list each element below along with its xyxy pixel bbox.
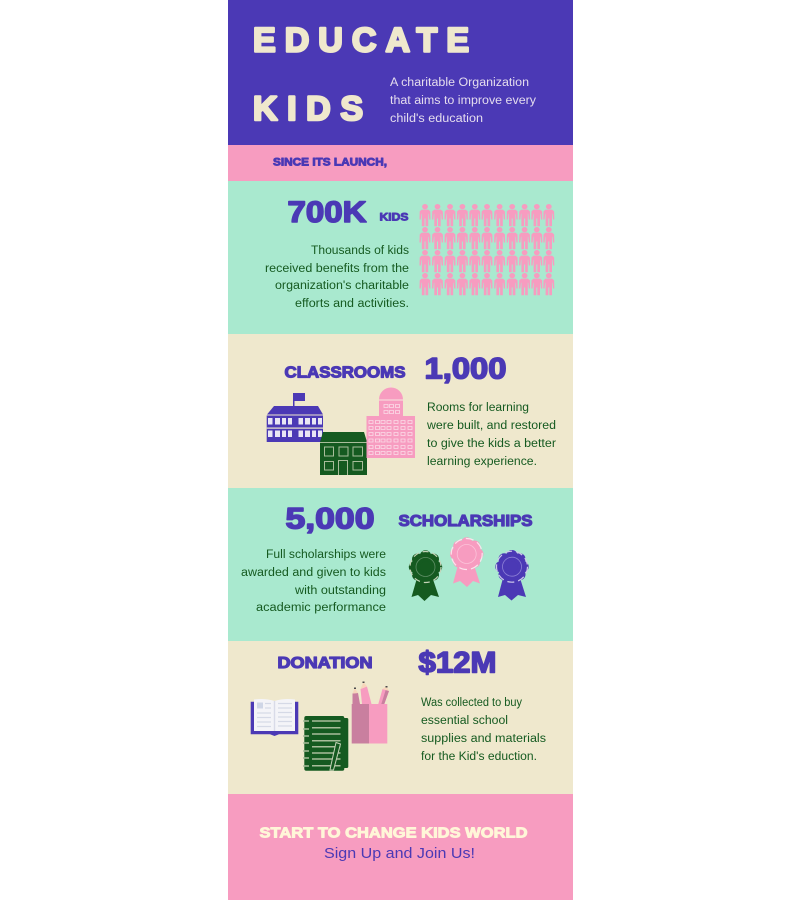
text: classrooms description: to give the kids a better	[427, 438, 556, 450]
text: donation description	[421, 697, 546, 763]
text: scholarships description: awarded and given to kids	[241, 567, 386, 579]
heading: start to change kids world: START TO CHANGE KIDS WORLD	[260, 826, 528, 842]
icon: blue school building	[267, 393, 323, 442]
heading: since its launch: SINCE ITS LAUNCH,	[273, 156, 387, 168]
label: donation: DONATION	[278, 655, 372, 672]
subtitle	[390, 77, 536, 125]
text: scholarships description: with outstanding	[294, 585, 386, 597]
subtitle: A charitable Organization	[390, 77, 529, 89]
title: Educate Kids: KIDS	[253, 90, 363, 128]
text: scholarships description	[241, 549, 386, 614]
label: kids: KIDS	[380, 212, 408, 224]
icon: open book	[251, 699, 298, 736]
panel: donation	[228, 641, 573, 794]
text: kids description	[265, 245, 409, 310]
icon: pink ribbon	[450, 537, 483, 587]
panel: call to action	[228, 794, 573, 900]
panel: header	[228, 0, 573, 145]
icon: crowd of people	[420, 204, 554, 295]
text: donation description: Was collected to buy	[421, 697, 522, 709]
text: donation description: essential school	[421, 715, 508, 727]
text: kids description: organization's charitable	[275, 280, 409, 292]
subtitle: child's education	[390, 113, 483, 125]
icon: green school building	[320, 432, 367, 475]
title: Educate Kids: EDUCATE	[253, 22, 469, 60]
text: scholarships description: academic performance	[256, 602, 386, 614]
text: donation description: for the Kid's eduction.	[421, 751, 537, 763]
subtitle: that aims to improve every	[390, 95, 536, 107]
text: sign up: Sign Up and Join Us!	[324, 845, 475, 862]
text: classrooms description: Rooms for learning	[427, 402, 529, 414]
text: classrooms description: were built, and restored	[426, 420, 556, 432]
text: classrooms description: learning experience.	[427, 456, 537, 468]
panel: since its launch	[228, 145, 573, 181]
text: classrooms description	[426, 402, 556, 468]
stat: 5,000: 5,000	[286, 502, 374, 536]
label: classrooms: CLASSROOMS	[284, 364, 406, 381]
icon: pink building	[366, 383, 415, 458]
icon: green ribbon	[409, 550, 442, 601]
stat: 700K: 700K	[288, 196, 367, 229]
text: kids description: Thousands of kids	[311, 245, 409, 257]
text: kids description: received benefits from the	[265, 263, 409, 275]
stat: $12M: $12M	[418, 646, 496, 680]
panel: 700K kids	[228, 181, 573, 334]
panel: classrooms	[228, 334, 573, 488]
text: scholarships description: Full scholarships were	[266, 549, 386, 561]
panel: scholarships	[228, 488, 573, 641]
stat: 1,000: 1,000	[424, 352, 506, 386]
title: Educate Kids	[253, 22, 469, 128]
text: kids description: efforts and activities.	[295, 298, 409, 310]
icon: spiral notebook	[303, 716, 348, 771]
text: donation description: supplies and materials	[421, 733, 546, 745]
icon: blue ribbon	[495, 550, 529, 600]
icon: pencil cup	[352, 682, 389, 744]
label: scholarships: SCHOLARSHIPS	[398, 513, 533, 530]
